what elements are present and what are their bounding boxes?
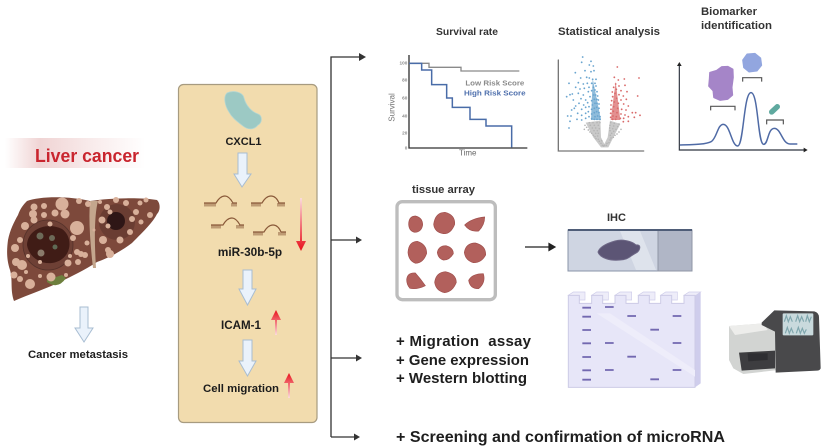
chart: survival curve: 20 (402, 130, 408, 135)
chart: biomarker peaks (677, 53, 808, 152)
text block: assays: + Gene expression (396, 352, 529, 369)
chart: survival curve: Time (459, 149, 477, 158)
icon: CXCL1 protein (225, 92, 261, 129)
icon: liver with tumours (7, 197, 160, 301)
icon: IHC slide (568, 229, 692, 271)
arrow: ICAM-1 to cell migration (239, 340, 256, 376)
heading: Survival rate: Survival rate (436, 26, 498, 38)
chart: survival curve: 40 (402, 114, 408, 119)
arrow: miR-30b-5p to ICAM-1 (239, 270, 256, 305)
text block: assays (396, 333, 532, 387)
chart: survival curve: Survival (388, 93, 397, 122)
label: ICAM-1: ICAM-1 (221, 319, 262, 332)
panel: tissue array (397, 202, 495, 300)
arrow: ICAM-1 increased (271, 310, 281, 335)
chart: survival curve: High Risk Score (464, 88, 526, 97)
chart: survival curve: 80 (402, 77, 408, 82)
heading: Biomarker identification: identification (701, 20, 772, 32)
icon: microRNA cluster (204, 196, 286, 236)
text: screening and confirmation: + Screening and confirmation of microRNA (396, 429, 725, 446)
heading: Biomarker identification: Biomarker (701, 6, 758, 18)
text block: assays: + Migration assay (396, 333, 532, 350)
icon: analysis instrument (729, 310, 821, 374)
chart: survival curve (388, 55, 527, 158)
label: miR-30b-5p: miR-30b-5p (218, 245, 282, 259)
text block: assays: + Western blotting (396, 370, 527, 387)
arrows: branching connector (331, 53, 366, 440)
label: CXCL1: CXCL1 (225, 136, 262, 148)
label: Cell migration: Cell migration (203, 383, 279, 395)
arrow: liver to metastasis (75, 307, 93, 342)
arrow: tissue array to IHC (525, 244, 555, 250)
label: tissue array: tissue array (412, 184, 476, 196)
chart: survival curve: Low Risk Score (465, 78, 524, 87)
label: IHC: IHC (607, 212, 626, 224)
chart: survival curve: 60 (402, 95, 408, 100)
heading: Liver cancer (5, 138, 145, 168)
label: Cancer metastasis: Cancer metastasis (28, 349, 128, 361)
heading: Liver cancer: Liver cancer (35, 145, 139, 166)
heading: Biomarker identification (701, 6, 772, 32)
arrow: cell migration increased (284, 373, 294, 398)
chart: survival curve: 0 (405, 145, 408, 150)
chart: survival curve: 100 (400, 61, 408, 66)
heading: Statistical analysis: Statistical analysis (558, 26, 660, 38)
icon: western blot gel (568, 292, 701, 387)
panel: signalling pathway (178, 84, 317, 422)
arrow: CXCL1 to miR-30b-5p (234, 153, 251, 187)
chart: volcano plot (558, 57, 644, 151)
arrow: miR-30b-5p decreased (296, 198, 306, 251)
